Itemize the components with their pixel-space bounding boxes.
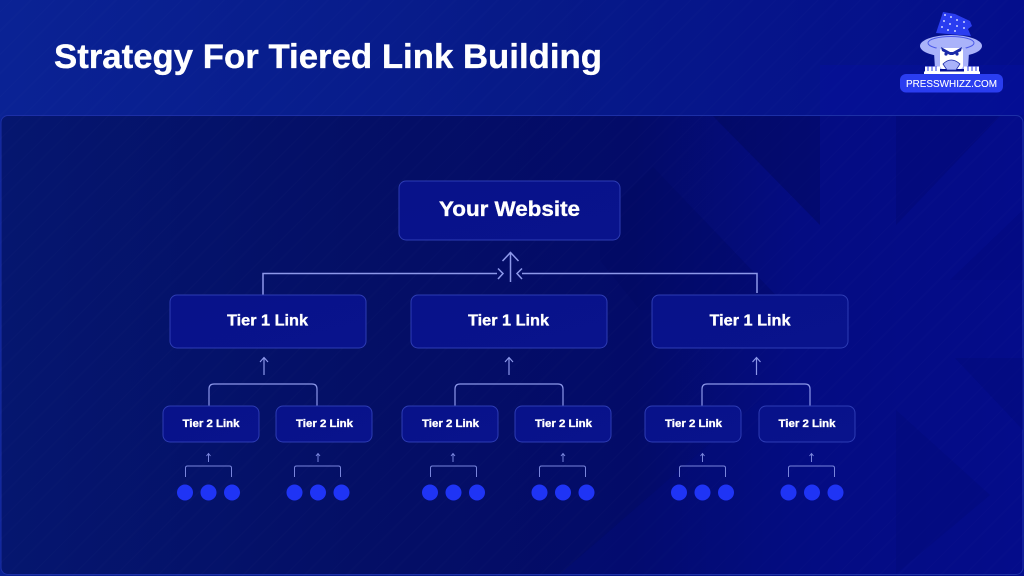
box: tier 2 f [759, 406, 855, 442]
tier 1 boxes [170, 295, 848, 348]
box: tier 2 b: Tier 2 Link [296, 418, 354, 430]
box: tier 2 b [276, 406, 372, 442]
box: tier 1 left: Tier 1 Link [227, 312, 308, 330]
box: tier 2 d: Tier 2 Link [535, 418, 593, 430]
box: Your Website: Your Website [439, 198, 580, 221]
box: tier 2 f: Tier 2 Link [778, 418, 836, 430]
box: tier 1 middle: Tier 1 Link [468, 312, 549, 330]
logo: PressWhizz wizard [900, 12, 1003, 92]
box: tier 1 middle [411, 295, 607, 348]
box: tier 2 e [645, 406, 741, 442]
box: tier 1 left [170, 295, 366, 348]
box: tier 2 a: Tier 2 Link [182, 418, 240, 430]
box: tier 1 right [652, 295, 848, 348]
connectors: tier 2 into tier 1 [209, 358, 810, 406]
logo pill: PRESSWHIZZ.COM [906, 78, 997, 90]
box: tier 2 d [515, 406, 611, 442]
panel: diagram background [1, 116, 1023, 574]
box: tier 2 c [402, 406, 498, 442]
box: tier 2 a [163, 406, 259, 442]
title: Strategy For Tiered Link Building [54, 38, 602, 76]
tier 2 boxes [163, 406, 855, 442]
icon: wizard hat [920, 12, 982, 57]
box: tier 2 c: Tier 2 Link [422, 418, 480, 430]
box: Your Website [399, 181, 620, 240]
icon: wizard face [924, 46, 980, 74]
connectors: dots into tier 2 [186, 454, 834, 477]
connector: tier 1 into website [263, 252, 757, 295]
dots: tier 3 sources [177, 484, 844, 500]
box: tier 2 e: Tier 2 Link [665, 418, 723, 430]
box: tier 1 right: Tier 1 Link [710, 312, 791, 330]
